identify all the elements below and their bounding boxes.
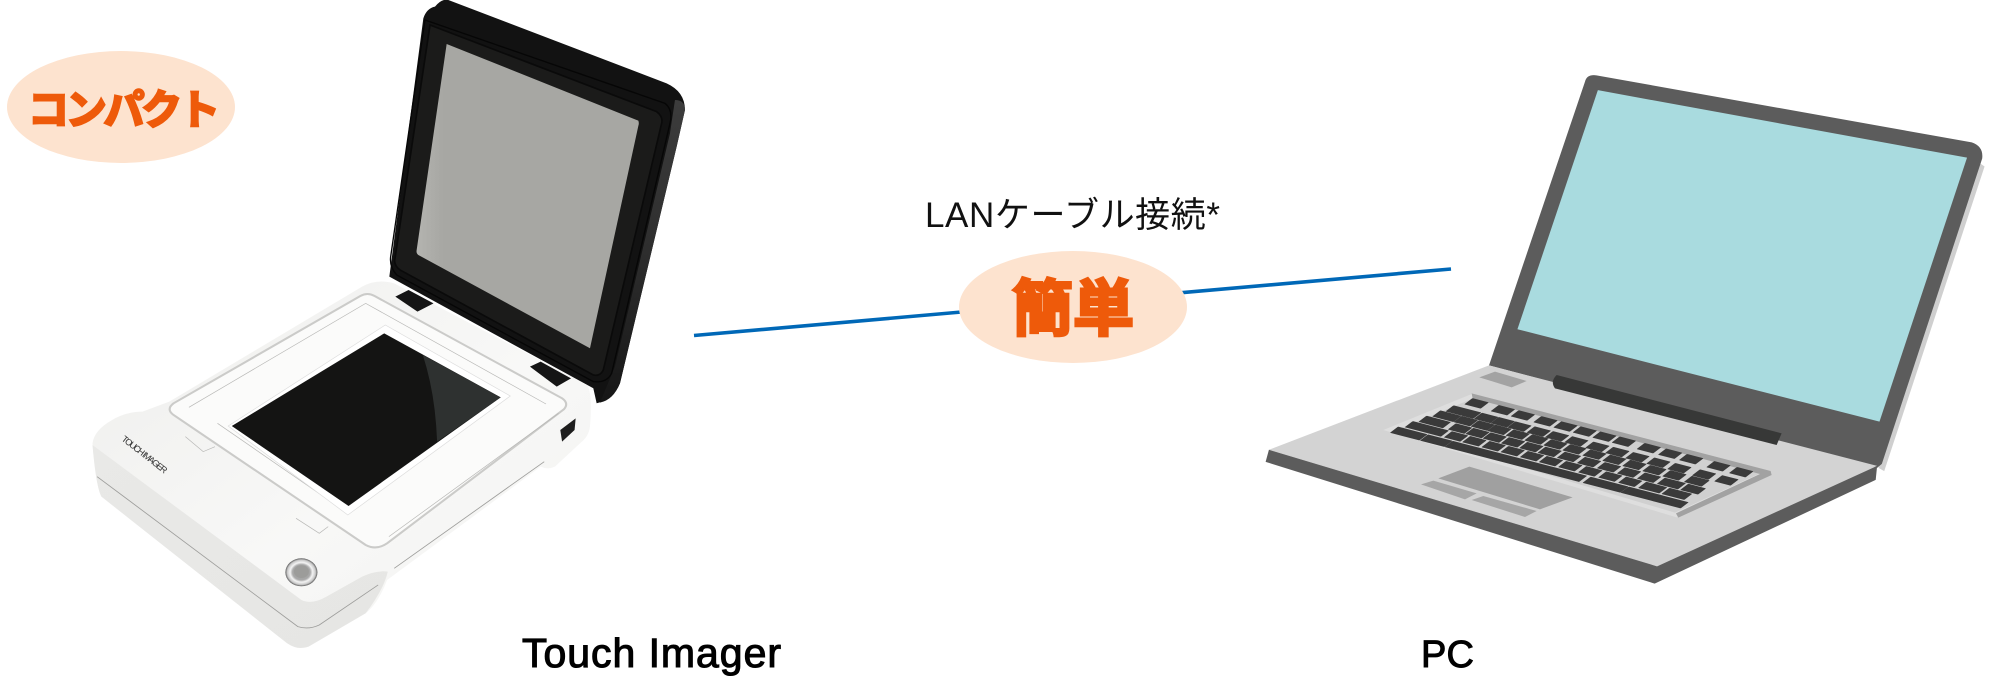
laptop hinge bar	[1553, 375, 1782, 445]
lid glass panel	[417, 44, 639, 348]
power button	[285, 558, 317, 586]
base body	[92, 281, 591, 648]
label: Touch Imager: Touch Imager	[522, 630, 781, 676]
connection line: LAN cable	[694, 269, 1451, 336]
laptop base	[1266, 365, 1877, 584]
base front face	[92, 445, 388, 648]
laptop shadow	[1879, 163, 1985, 471]
LAN port	[560, 418, 576, 442]
device logo text: TOUCH IMAGER	[120, 434, 170, 476]
scanner base	[92, 281, 591, 648]
speaker grille	[1479, 372, 1527, 387]
badge: compact	[7, 51, 235, 163]
laptop display bezel	[1489, 75, 1982, 468]
device: laptop PC	[1266, 75, 1985, 584]
badge: easy: 簡単	[1012, 275, 1134, 343]
label: LAN cable connection: LANケーブル接続*	[925, 196, 1220, 235]
badge: compact: コンパクト	[28, 87, 220, 133]
platen frame	[170, 294, 566, 547]
laptop screen	[1517, 90, 1967, 422]
touch screen	[232, 333, 501, 506]
laptop keyboard deck details	[1383, 372, 1782, 518]
keyboard	[1383, 392, 1772, 518]
platen inner lines	[185, 303, 559, 537]
lid hinges	[395, 290, 571, 387]
touchpad	[1421, 467, 1573, 517]
screen bevel	[228, 325, 510, 515]
badge: easy	[959, 251, 1187, 363]
scanner lid	[389, 0, 685, 403]
label: PC: PC	[1421, 634, 1474, 676]
